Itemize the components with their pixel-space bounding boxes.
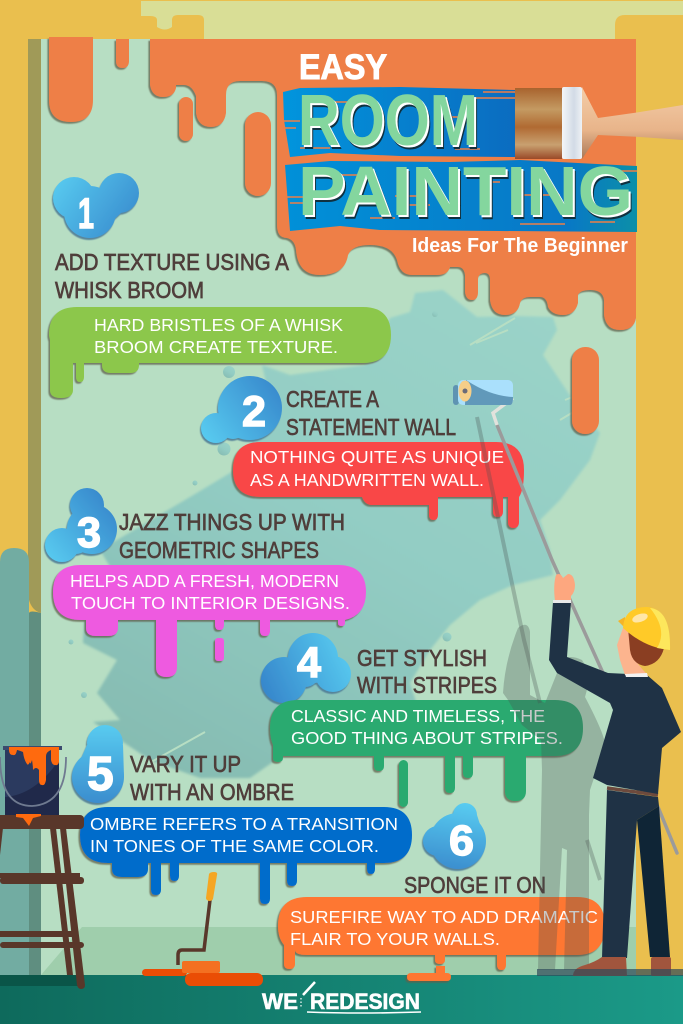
- shoes: [573, 957, 671, 976]
- hair: [628, 628, 664, 666]
- heading 1: WHISK BROOM: [55, 277, 204, 303]
- step 6: [278, 803, 605, 981]
- pill 5: OMBRE REFERS TO A TRANSITION: [90, 814, 398, 834]
- title word: painting: PAINTING: [298, 152, 633, 230]
- title word: room: ROOM: [300, 83, 480, 163]
- floor shadow under painter: [537, 969, 683, 976]
- pill 6: [278, 897, 605, 981]
- heading 6: SPONGE IT ON: [404, 872, 546, 898]
- badge 6: [423, 803, 486, 869]
- spilled paint: [142, 969, 263, 986]
- step 4: [261, 633, 583, 807]
- heading 2: [286, 386, 456, 440]
- pill 3: HELPS ADD A FRESH, MODERN: [70, 571, 339, 591]
- badge 1: 1: [78, 190, 94, 238]
- badge 1: [53, 173, 139, 238]
- legs: [602, 790, 670, 958]
- pill 5: IN TONES OF THE SAME COLOR.: [90, 836, 379, 856]
- paint can on stool: [0, 746, 85, 989]
- heading 1: [55, 249, 289, 303]
- pill 3: [53, 565, 366, 677]
- pill 6: SUREFIRE WAY TO ADD DRAMATIC: [290, 907, 598, 927]
- badge 5: [72, 725, 124, 803]
- blue brush stroke: painting: [285, 160, 637, 232]
- title word: painting: PAINTING: [301, 156, 636, 234]
- badge 2: 2: [242, 388, 266, 436]
- painter: [549, 574, 681, 976]
- cuff: [553, 600, 571, 603]
- roller: [453, 380, 513, 405]
- floor: [0, 975, 683, 1024]
- can body: [0, 746, 66, 815]
- wall: [41, 39, 636, 975]
- heading 3: [119, 509, 345, 563]
- pill 2: [233, 442, 524, 528]
- heading 4: [357, 645, 497, 698]
- badge 2: [201, 376, 282, 443]
- collar: [625, 673, 648, 677]
- icon: paint brush: [515, 87, 683, 159]
- paint splash: [68, 290, 600, 778]
- pill 4: [270, 700, 583, 807]
- heading 1: ADD TEXTURE USING A: [55, 249, 289, 275]
- badge 3: 3: [77, 509, 101, 557]
- pale paint strip at the top: [141, 1, 683, 39]
- badge 4: 4: [297, 639, 321, 687]
- pill 6: FLAIR TO YOUR WALLS.: [290, 929, 500, 949]
- paint roller on pole: [453, 380, 677, 853]
- title word: room: ROOM: [298, 81, 478, 161]
- heading 5: [130, 751, 294, 805]
- step 5: [72, 725, 412, 904]
- logo wordmark second part: REDESIGN: [310, 989, 420, 1014]
- subtitle: Ideas For The Beginner: [412, 235, 628, 257]
- heading 4: WITH STRIPES: [357, 672, 497, 698]
- splash streaks: [128, 318, 585, 775]
- cast shadow of painter: [477, 417, 605, 970]
- title: [283, 48, 637, 257]
- pole neck: [493, 398, 513, 425]
- logo underline: [307, 1012, 421, 1013]
- title word: room: ROOM: [301, 85, 481, 165]
- title word: easy: EASY: [299, 48, 387, 87]
- pill 1: HARD BRISTLES OF A WHISK: [94, 315, 343, 335]
- pill 4: GOOD THING ABOUT STRIPES.: [291, 728, 563, 748]
- pill 5: [80, 807, 412, 904]
- pill 2: NOTHING QUITE AS UNIQUE: [250, 447, 504, 467]
- step 3: [45, 488, 366, 677]
- logo: [262, 982, 421, 1014]
- heading 2: CREATE A: [286, 386, 379, 412]
- pill 4: CLASSIC AND TIMELESS, THE: [291, 706, 545, 726]
- logo brush: [301, 982, 315, 1008]
- roller head: [182, 961, 220, 973]
- hand: [554, 574, 575, 601]
- blue brush stroke: room: [283, 87, 515, 157]
- heading 3: JAZZ THINGS UP WITH: [119, 509, 345, 535]
- badge 3: [45, 488, 117, 562]
- pole: [497, 425, 677, 853]
- title word: painting: PAINTING: [300, 154, 635, 232]
- badge 6: 6: [449, 817, 474, 865]
- step 2: [201, 376, 524, 528]
- pill 1: [49, 307, 391, 398]
- pill 2: AS A HANDWRITTEN WALL.: [250, 470, 484, 490]
- pill 3: TOUCH TO INTERIOR DESIGNS.: [71, 593, 350, 613]
- grip: [206, 872, 217, 901]
- stool: [0, 815, 85, 989]
- shadow pillar: [0, 548, 41, 975]
- heading 3: GEOMETRIC SHAPES: [119, 537, 319, 563]
- olive wall edge: [28, 39, 41, 613]
- face and neck: [617, 628, 648, 675]
- shaft: [178, 900, 210, 965]
- belt: [607, 788, 658, 795]
- heading 4: GET STYLISH: [357, 645, 487, 671]
- heading 5: VARY IT UP: [130, 751, 241, 777]
- orange ceiling paint: [49, 37, 636, 434]
- paint roller on floor: [142, 872, 263, 986]
- jacket: [549, 602, 681, 794]
- heading 2: STATEMENT WALL: [286, 414, 456, 440]
- step 1: [49, 173, 391, 398]
- hard hat: [618, 607, 670, 650]
- baseboard: [41, 927, 636, 975]
- pill 1: BROOM CREATE TEXTURE.: [94, 337, 338, 357]
- orange paint drips: [9, 747, 59, 826]
- heading 5: WITH AN OMBRE: [130, 779, 294, 805]
- logo wordmark: WE: [262, 989, 298, 1014]
- badge 5: 5: [87, 748, 114, 801]
- badge 4: [261, 633, 351, 703]
